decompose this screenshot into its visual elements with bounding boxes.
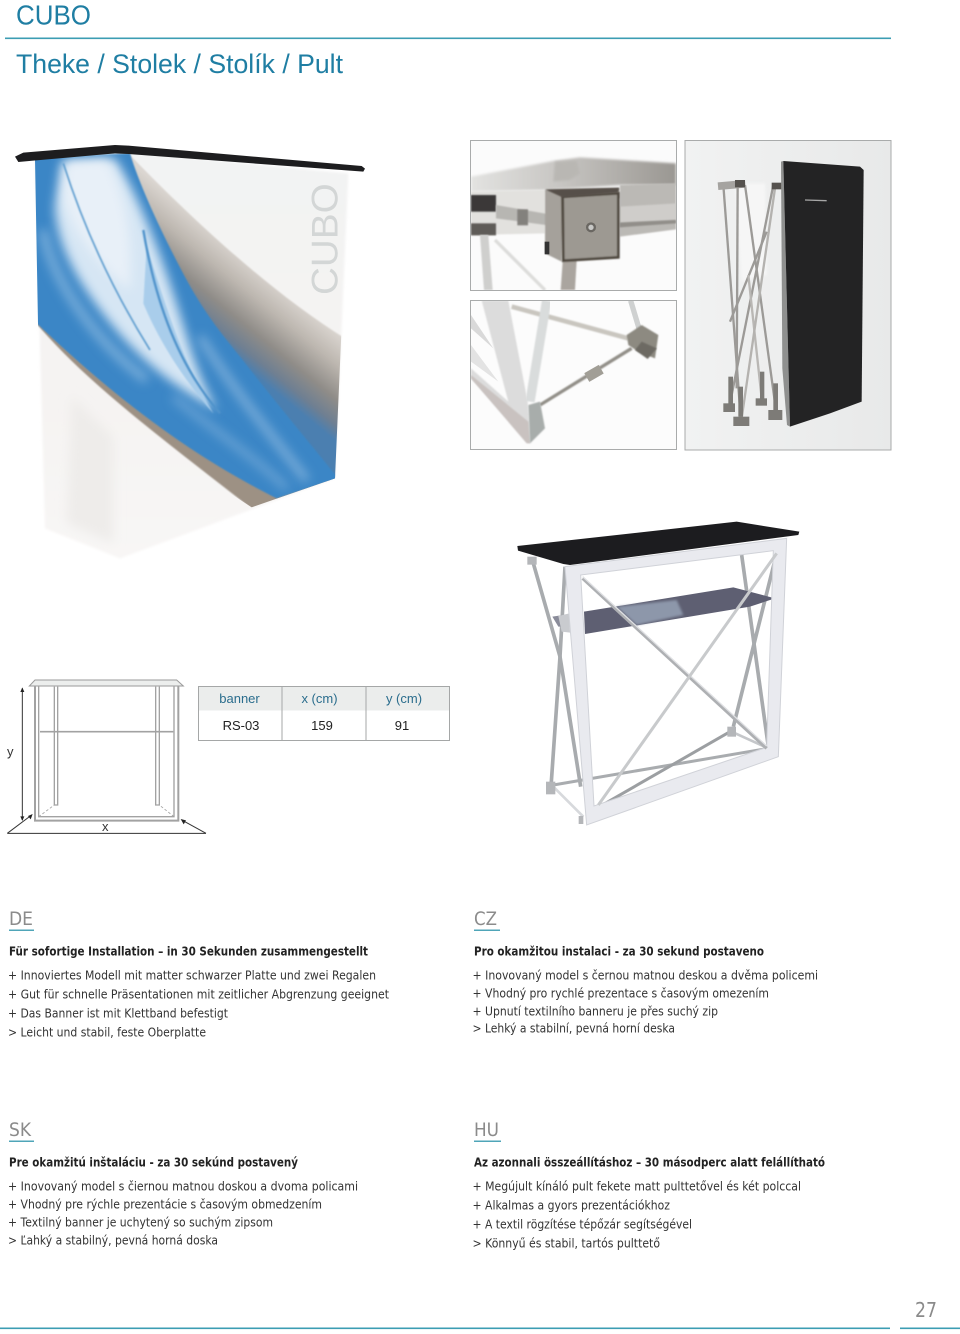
detail photo: corner connector bbox=[470, 140, 676, 290]
text block: CZ: > Lehký a stabilní, pevná horní deska bbox=[472, 1020, 675, 1036]
text block: SK bbox=[8, 1119, 358, 1248]
text block: DE: + Das Banner ist mit Klettband befestigt bbox=[8, 1006, 228, 1020]
header: CUBO: CUBO bbox=[16, 0, 91, 30]
text block: DE: + Gut für schnelle Präsentationen mit zeitlicher Abgrenzung geeignet bbox=[8, 986, 389, 1002]
dimensions table: 91 bbox=[395, 718, 409, 733]
text block: SK: + Inovovaný model s čiernou matnou doskou a dvoma policami bbox=[8, 1178, 358, 1194]
shelf bbox=[584, 587, 775, 634]
dimensions table: y (cm) bbox=[386, 691, 422, 706]
dimension diagram bbox=[7, 680, 206, 834]
dimensions table: RS-03 bbox=[223, 718, 259, 733]
text block: HU: > Könnyű és stabil, tartós pulttető bbox=[472, 1236, 660, 1250]
text block: SK: + Vhodný pre rýchle prezentácie s časovým obmedzením bbox=[8, 1196, 322, 1212]
dimensions table: banner bbox=[219, 691, 260, 706]
text block: SK: + Textilný banner je uchytený so suchým zipsom bbox=[8, 1214, 273, 1230]
brand lettering on banner: CUBO bbox=[303, 183, 345, 295]
dimensions table bbox=[198, 686, 450, 741]
product photo: open frame with black top and shelf bbox=[517, 522, 799, 825]
text block: DE: > Leicht und stabil, feste Oberplatte bbox=[8, 1024, 206, 1040]
text block: HU: + A textil rögzítése tépőzár segítségével bbox=[472, 1216, 692, 1232]
text block: SK: Pre okamžitú inštaláciu - za 30 sekúnd postavený bbox=[9, 1154, 298, 1170]
text block: CZ bbox=[472, 908, 818, 1036]
product photo: counter with printed banner bbox=[15, 145, 365, 558]
text block: DE: DE bbox=[9, 908, 33, 930]
banner body bbox=[35, 152, 348, 558]
text block: DE: Für sofortige Installation – in 30 Sekunden zusammengestellt bbox=[9, 944, 368, 958]
detail photo: folded frame with black top bbox=[685, 140, 891, 450]
footer rule and page number: 27 bbox=[915, 1298, 937, 1322]
joints bbox=[527, 557, 736, 824]
text block: CZ: + Vhodný pro rychlé prezentace s časovým omezením bbox=[472, 986, 769, 1000]
black top bbox=[517, 522, 799, 565]
dimensions table: 159 bbox=[311, 718, 333, 733]
grey swoosh bbox=[128, 153, 347, 497]
rear frame rods bbox=[533, 553, 777, 817]
text block: HU: HU bbox=[474, 1119, 499, 1141]
text block: DE: + Innoviertes Modell mit matter schwarzer Platte und zwei Regalen bbox=[8, 968, 376, 982]
text block: SK: > Ľahký a stabilný, pevná horná doska bbox=[8, 1232, 218, 1248]
text block: CZ: + Upnutí textilního banneru je přes suchý zip bbox=[472, 1004, 718, 1018]
light highlights bbox=[55, 158, 217, 410]
detail photo: folding rod joint bbox=[470, 300, 676, 450]
front frame bbox=[565, 538, 787, 825]
dimension diagram: x bbox=[102, 819, 109, 834]
dimensions table: x (cm) bbox=[301, 691, 338, 706]
front diagonals bbox=[583, 578, 767, 748]
dimension diagram: y bbox=[7, 744, 14, 759]
title: Theke / Stolek / Stolík / Pult bbox=[16, 49, 343, 79]
text block: HU: + Megújult kínáló pult fekete matt pulttetővel és két polccal bbox=[472, 1178, 801, 1194]
text block: HU bbox=[472, 1119, 825, 1250]
text block: CZ: CZ bbox=[474, 908, 497, 930]
text block: CZ: + Inovovaný model s černou matnou deskou a dvěma policemi bbox=[472, 968, 818, 982]
text block: CZ: Pro okamžitou instalaci - za 30 sekund postaveno bbox=[474, 944, 764, 958]
text block: HU: + Alkalmas a gyors prezentációkhoz bbox=[472, 1198, 670, 1212]
text block: SK: SK bbox=[9, 1119, 31, 1141]
text block: DE bbox=[8, 908, 389, 1040]
blue swoosh bbox=[32, 153, 338, 498]
text block: HU: Az azonnali összeállításhoz – 30 másodperc alatt felállítható bbox=[474, 1154, 825, 1170]
black counter top bbox=[15, 145, 365, 172]
